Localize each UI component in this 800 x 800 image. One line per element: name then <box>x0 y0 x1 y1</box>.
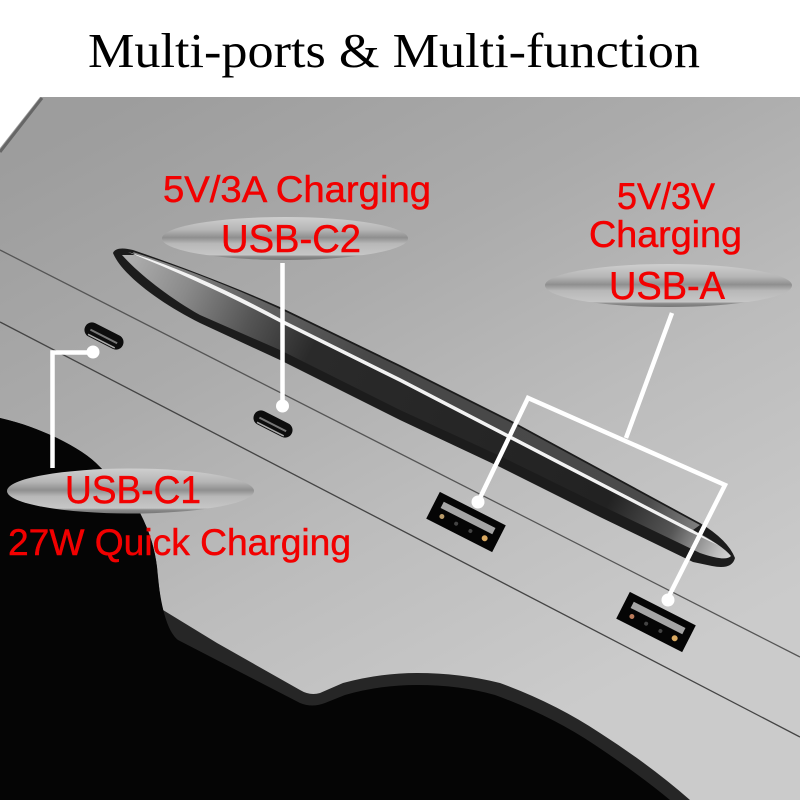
label: USB-A: USB-A <box>609 265 725 308</box>
text: Charging: Charging <box>589 214 742 255</box>
styling blade trim <box>113 249 735 567</box>
leader bracket: USB-A <box>472 313 725 606</box>
port: USB-C1 <box>82 320 126 352</box>
port: USB-A left <box>426 492 506 552</box>
port: USB-A right <box>616 592 696 652</box>
text: 27W Quick Charging: 27W Quick Charging <box>8 522 351 563</box>
cup holder cut-outs <box>0 418 690 800</box>
leader line: USB-C1 <box>52 346 100 468</box>
label: USB-A <box>545 264 792 308</box>
leader line: USB-C2 <box>276 263 289 412</box>
label: USB-C2: USB-C2 <box>221 218 361 261</box>
label: USB-C1 <box>7 468 254 514</box>
label: USB-C2 <box>162 217 408 261</box>
label: USB-C1: USB-C1 <box>65 469 201 512</box>
title: Multi-ports & Multi-function <box>88 23 700 78</box>
port: USB-C2 <box>251 408 295 440</box>
text: 5V/3V: 5V/3V <box>617 176 715 217</box>
text: 5V/3A Charging: 5V/3A Charging <box>163 169 431 210</box>
